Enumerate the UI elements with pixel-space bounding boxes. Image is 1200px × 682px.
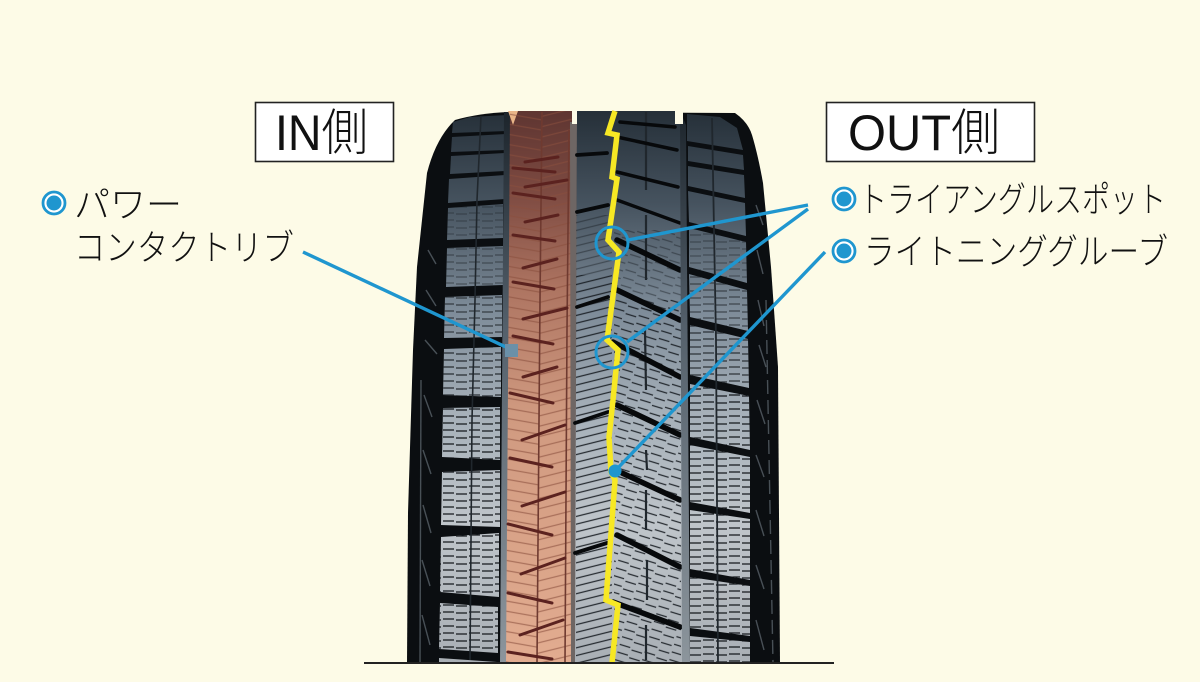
rib slots	[508, 157, 567, 659]
circle marker 1	[596, 227, 628, 259]
rib sipes	[506, 111, 572, 663]
rib center groove and edge	[537, 112, 569, 663]
callout: power contact rib: コンタクトリブ	[74, 227, 294, 268]
power rib marker	[505, 344, 518, 357]
leader: triangle spots	[627, 205, 808, 342]
yellow lightning groove	[606, 111, 619, 663]
left shoulder sipes	[439, 204, 503, 653]
label: IN side	[256, 102, 394, 162]
groove right of center rib	[680, 111, 690, 663]
tire tread illustration	[407, 110, 780, 663]
top notches	[572, 110, 683, 124]
center-left rib	[575, 111, 612, 663]
leader: lightning groove	[615, 252, 825, 471]
baseline	[364, 662, 834, 664]
center rib short grooves	[645, 112, 647, 660]
right shoulder divider	[712, 118, 718, 663]
tire silhouette	[407, 112, 780, 663]
left shoulder blocks	[439, 115, 507, 663]
groove right of power contact rib	[570, 122, 577, 663]
lightning marker dot	[608, 464, 622, 478]
label: IN side: IN側	[275, 105, 368, 161]
center-right rib	[612, 111, 682, 663]
label: OUT side: OUT側	[848, 105, 1000, 161]
sidewall lugs	[420, 205, 773, 663]
leader: power contact rib	[303, 252, 510, 349]
center rib main slots	[575, 122, 680, 627]
right shoulder sipes	[689, 228, 750, 663]
center rib sipes	[576, 215, 681, 663]
callout: power contact rib: パワー	[74, 184, 182, 225]
leader lines and markers	[303, 205, 825, 478]
rib corner highlight	[508, 111, 518, 125]
left shoulder divider	[470, 116, 481, 660]
circle marker 2	[596, 336, 628, 368]
power contact rib	[506, 111, 572, 663]
right shoulder blocks	[687, 114, 750, 663]
groove left of power contact rib	[500, 112, 510, 663]
callout: power contact rib	[43, 184, 294, 268]
